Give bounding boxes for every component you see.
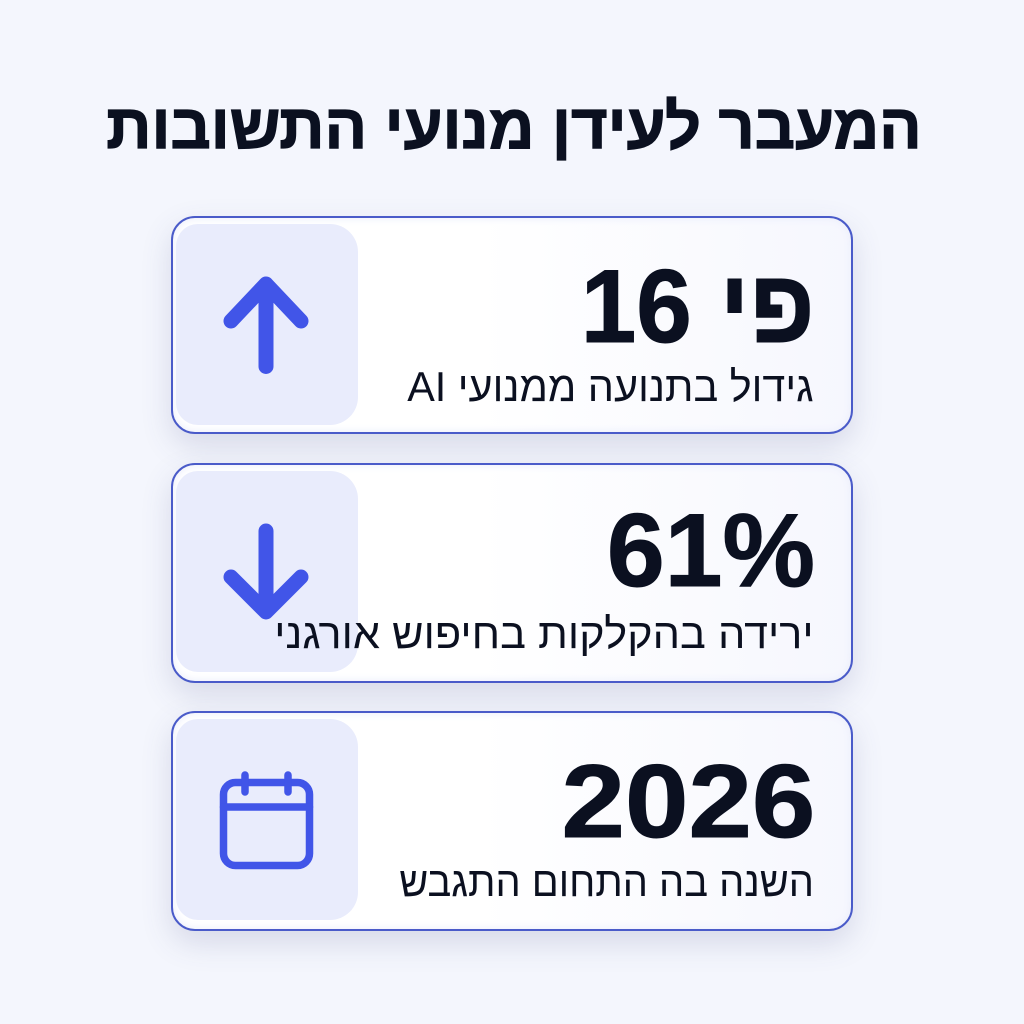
icon: up arrow (176, 224, 358, 425)
label: traffic growth: גידול בתנועה ממנועי AI (408, 363, 814, 410)
icon: calendar (176, 719, 358, 920)
label: year field formed: השנה בה התחום התגבש (399, 858, 814, 905)
panel: organic click decline (171, 463, 853, 683)
panel: year 2026 (171, 711, 853, 931)
icon: down arrow (176, 471, 358, 672)
stat: 61 percent: 61% (607, 493, 815, 609)
title: המעבר לעידן מנועי התשובות (106, 92, 922, 162)
stat: 2026: 2026 (561, 744, 815, 860)
stat: 16 times: פי 16 (581, 249, 815, 365)
panel: traffic growth (171, 216, 853, 434)
label: organic click decline: ירידה בהקלקות בחיפוש אורגני (275, 610, 814, 657)
